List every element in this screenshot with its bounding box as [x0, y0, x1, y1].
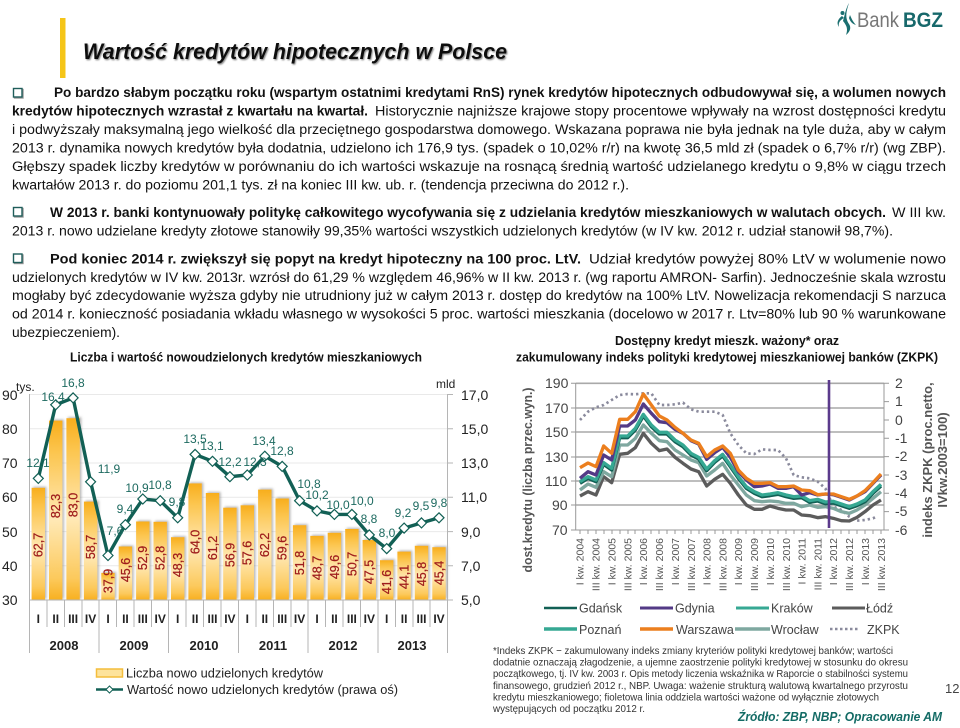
- quarter labels: II: [192, 612, 198, 626]
- bar value labels: 59,6: [276, 536, 290, 560]
- left axis labels: 150: [545, 424, 569, 440]
- quarter labels: IV: [294, 612, 305, 626]
- left chart legend: [96, 666, 398, 697]
- left axis labels: [2, 380, 35, 608]
- line value labels: 12,3: [243, 455, 267, 469]
- x axis quarter labels: III kw. 2005: [622, 538, 634, 591]
- bar value labels: 44,1: [397, 565, 411, 589]
- quarter labels: I: [37, 612, 40, 626]
- bar value labels: 49,6: [328, 555, 342, 579]
- right chart legend: Gdańsk: [579, 602, 623, 616]
- text block: paragraph 1: kredytów hipotecznych wzrastał z kwartału na kwartał.: [12, 104, 368, 118]
- text block: paragraph 2: [12, 205, 946, 238]
- line value labels: 7,6: [107, 524, 124, 538]
- right axis labels: [436, 377, 488, 608]
- left axis labels: 50: [2, 524, 18, 540]
- right chart heading: Dostępny kredyt mieszk. ważony* oraz: [615, 334, 839, 348]
- quarter labels: III: [347, 612, 357, 626]
- right chart legend: Wrocław: [771, 623, 820, 637]
- line value labels: 10,9: [125, 481, 149, 495]
- text block: paragraph 3: udzielonych kredytów w IV kw. 2013r. wzrósł do 61,29 % względem 46,96% w II kw. 2013 r. (wg raportu AMRON- Sarfin). Jednocześnie skala wzrostu: [12, 270, 946, 285]
- title: Wartość kredytów hipotecznych w Polsce: [83, 39, 507, 64]
- bar value labels: 58,7: [84, 535, 98, 559]
- logo: Bank BGZ: BGZ: [903, 9, 943, 32]
- source: Źródło: ZBP, NBP; Opracowanie AM: [737, 709, 943, 724]
- right axis labels: 0: [895, 412, 903, 428]
- right axis title: IVkw.2003=100): [935, 412, 950, 508]
- right axis labels: -1: [895, 430, 908, 446]
- left axis labels: 190: [545, 375, 569, 391]
- year labels: 2009: [120, 638, 148, 653]
- line value labels: 8,8: [361, 512, 378, 526]
- left axis labels: 70: [552, 522, 568, 538]
- quarter labels: II: [261, 612, 268, 626]
- right axis labels: 15,0: [461, 421, 488, 437]
- footnote: dodatnie oznaczają złagodzenie, a ujemne zaostrzenie polityki kredytowej w stosunku do okresu: [493, 658, 908, 668]
- right axis labels: 9,0: [461, 524, 481, 540]
- quarter labels: II: [401, 612, 407, 626]
- x axis quarter labels: III kw. 2011: [812, 538, 824, 590]
- x axis quarter labels: [574, 538, 888, 591]
- left axis labels: 90: [552, 497, 568, 513]
- right axis labels: 17,0: [461, 387, 488, 403]
- line value labels: 9,8: [431, 496, 448, 510]
- left axis labels: 130: [545, 449, 569, 465]
- x axis quarter labels: I kw. 2012: [828, 538, 840, 585]
- quarter labels: IV: [364, 612, 375, 626]
- right chart legend: Łódź: [866, 602, 893, 616]
- quarter labels: IV: [85, 612, 96, 626]
- line value labels: 9,8: [169, 495, 186, 509]
- right chart heading: zakumulowany indeks polityki kredytowej mieszkaniowej banków (ZKPK): [516, 351, 938, 365]
- right chart heading: [516, 334, 938, 365]
- line value labels: 12,8: [270, 444, 294, 458]
- right axis labels: -4: [895, 485, 908, 501]
- bar value labels: 50,7: [345, 552, 359, 576]
- x axis quarter labels: I kw. 2011: [796, 538, 808, 585]
- bar value labels: 83,0: [66, 493, 80, 517]
- text block: paragraph 3: Pod koniec 2014 r. zwiększył się popyt na kredyt hipoteczny na 100 proc. LtV.: [50, 252, 581, 266]
- x axis quarter labels: III kw. 2012: [844, 538, 856, 591]
- text block: paragraph 1: [12, 85, 946, 192]
- x axis quarter labels: III kw. 2004: [590, 538, 602, 591]
- x axis quarter labels: III kw. 2006: [654, 538, 666, 591]
- right axis labels: 13,0: [461, 455, 488, 471]
- year labels: 2012: [329, 638, 357, 653]
- bullet 2: [14, 208, 22, 216]
- bar value labels: 47,5: [363, 560, 377, 584]
- city series and ZKPK: [580, 393, 881, 521]
- page number: 12: [945, 681, 959, 696]
- right chart legend: Kraków: [771, 602, 814, 616]
- text block: paragraph 2: W 2013 r. banki kontynuowały politykę całkowitego wycofywania się z udzielania kredytów mieszkaniowych w walutach obcych.: [50, 205, 886, 220]
- bar value labels: 52,9: [136, 546, 150, 570]
- quarter labels: I: [385, 612, 388, 626]
- right chart legend: Poznań: [579, 623, 621, 637]
- bar value labels: 52,8: [154, 546, 168, 570]
- line value labels: 9,2: [395, 506, 412, 520]
- line value labels: 11,9: [98, 462, 121, 476]
- bar value labels: 37,9: [101, 569, 115, 593]
- right axis labels: -2: [895, 448, 908, 464]
- left axis labels: [545, 375, 569, 538]
- right axis labels: 1: [895, 393, 903, 409]
- year labels: 2010: [190, 638, 218, 653]
- year labels: 2011: [259, 638, 287, 653]
- left axis labels: 170: [545, 400, 569, 416]
- quarter labels: IV: [155, 612, 166, 626]
- bar value labels: 48,3: [171, 553, 185, 577]
- logo: Bank BGZ: Bank: [857, 9, 899, 32]
- bar value labels: 82,3: [49, 494, 63, 518]
- right axis labels: 2: [895, 375, 903, 391]
- bar value labels: 62,2: [258, 533, 272, 557]
- right chart legend: [544, 602, 900, 637]
- line value labels: 10,2: [305, 488, 329, 502]
- text block: paragraph 2: W III kw.: [892, 205, 946, 220]
- right axis labels: -5: [895, 503, 908, 519]
- left axis title: dost.kredytu (liczba przec.wyn.): [520, 388, 535, 572]
- line value labels: 8,0: [379, 526, 396, 540]
- text block: paragraph 2: 2013 r. nowo udzielane kredyty złotowe stanowiły 99,35% wartości wszystkich udzielonych kredytów (w IV kw. 2012 r. udział stanowił 98,7%).: [12, 224, 893, 238]
- left axis labels: 60: [2, 489, 18, 505]
- left chart legend: Wartość nowo udzielonych kredytów (prawa oś): [127, 682, 398, 697]
- left chart heading: Liczba i wartość nowoudzielonych kredytów mieszkaniowych: [70, 351, 422, 365]
- bar value labels: 57,6: [241, 541, 255, 565]
- quarter labels: [37, 612, 445, 626]
- x axis quarter labels: III kw. 2008: [718, 538, 730, 591]
- x axis quarter labels: III kw. 2009: [749, 538, 761, 591]
- x axis quarter labels: I kw. 2008: [702, 538, 714, 585]
- right chart legend: ZKPK: [867, 623, 900, 637]
- bar value labels: 48,7: [310, 556, 324, 580]
- text block: paragraph 1: kwartałów 2013 r. do poziomu 201,1 tys. zł na koniec III kw. ub. r. (tendencja przeciwna do 2012 r.).: [12, 178, 629, 192]
- quarter labels: I: [106, 612, 110, 626]
- bar value labels: 45,4: [432, 561, 446, 585]
- quarter labels: III: [68, 612, 78, 626]
- line value labels: 12,1: [26, 456, 50, 470]
- x axis quarter labels: III kw. 2013: [876, 538, 888, 591]
- text block: paragraph 1: i podwyższały maksymalną jego wielkość dla przeciętnego gospodarstwa domowego. Wskazana poprawa nie była jednak na tyle duża, aby w całym: [12, 122, 946, 137]
- x axis quarter labels: I kw. 2013: [860, 538, 872, 585]
- text block: paragraph 1: Po bardzo słabym początku roku (wspartym ostatnimi kredytami RnS) rynek kredytów hipotecznych odbudowywał się, a wolumen nowych: [54, 85, 946, 100]
- right chart legend: Warszawa: [676, 623, 734, 637]
- quarter labels: III: [207, 612, 218, 626]
- bullet 3: [14, 254, 22, 262]
- footnote: kredytu mieszkaniowego; fioletowa linia oddziela wartości ważone od wyłącznie złotowych: [493, 692, 879, 704]
- line value labels: 13,5: [183, 432, 207, 446]
- left axis labels: 30: [2, 592, 18, 608]
- logo: Bank BGZ: [838, 3, 943, 35]
- text block: paragraph 1: Historycznie najniższe krajowe stopy procentowe wpływały na wzrost dostępności kredytu: [375, 104, 946, 118]
- line value labels: 10,8: [297, 477, 321, 491]
- bar value labels: 51,8: [293, 551, 307, 575]
- purple divider: [828, 380, 830, 528]
- x axis quarter labels: I kw. 2004: [574, 538, 586, 585]
- bar value labels: 45,8: [415, 562, 429, 586]
- right axis labels: -3: [895, 467, 908, 483]
- left axis labels: 110: [545, 473, 568, 489]
- text block: paragraph 1: Głębszy spadek liczby kredytów w porównaniu do ich wartości wskazuje na rosnącą średnią wartość udzielanego kredytu o 9,8% w ciągu trzech: [12, 159, 946, 174]
- bar value labels: 62,7: [32, 533, 46, 557]
- yellow title accent bar: [60, 18, 66, 78]
- quarter labels: I: [315, 612, 319, 626]
- quarter labels: IV: [433, 612, 445, 626]
- left axis labels: tys.: [16, 380, 35, 394]
- footnote: występujących od początku 2012 r.: [492, 704, 645, 715]
- year labels: 2008: [50, 638, 78, 653]
- text block: paragraph 3: ubezpieczeniem).: [12, 325, 120, 340]
- x axis quarter labels: I kw. 2010: [765, 538, 777, 585]
- bars: [32, 418, 446, 600]
- quarter labels: II: [331, 612, 338, 626]
- x axis quarter labels: I kw. 2007: [670, 538, 682, 585]
- line value labels: 9,4: [117, 502, 134, 516]
- quarter labels: I: [246, 612, 249, 626]
- line value labels: 10,8: [148, 478, 172, 492]
- bar value labels: 56,9: [223, 543, 237, 567]
- footnote: początkowego, tj. IV kw. 2003 r. Opis metody liczenia wskaźnika w Raporcie o stabilności systemu: [493, 669, 908, 680]
- x axis quarter labels: III kw. 2010: [781, 538, 793, 591]
- line value labels: 13,4: [252, 434, 276, 448]
- quarter labels: II: [52, 612, 59, 626]
- x axis quarter labels: I kw. 2009: [733, 538, 745, 585]
- text block: paragraph 3: od 2014 r. konieczność posiadania wkładu własnego w wysokości 5 proc. wartości mieszkania (docelowo w 2017 r. Ltv=80% lub 90 % warunkowane: [12, 306, 946, 322]
- quarter labels: II: [122, 612, 129, 626]
- quarter labels: III: [138, 612, 148, 626]
- line value labels: 10,0: [350, 494, 374, 508]
- left axis labels: 70: [2, 455, 18, 471]
- x axis quarter labels: I kw. 2006: [638, 538, 650, 585]
- year labels: 2013: [398, 638, 426, 653]
- bar value labels: 45,6: [119, 558, 133, 582]
- line value labels: [26, 376, 448, 540]
- bar value labels: [32, 493, 446, 594]
- right axis labels: 5,0: [461, 592, 481, 608]
- bar value labels: 64,0: [188, 530, 202, 554]
- text block: paragraph 3: mogłaby być zdecydowanie wyższa gdyby nie utrudniony już w całym 2013 r. dostęp do kredytów na 100% LtV. Nowelizacja rekomendacji S narzuca: [12, 288, 947, 303]
- right axis title: indeks ZKPK (proc.netto,: [920, 382, 935, 538]
- line value labels: 16,4: [41, 390, 65, 404]
- quarter labels: IV: [224, 612, 236, 626]
- footnote: *Indeks ZKPK − zakumulowany indeks zmiany kryteriów polityki kredytowej banków; wartości: [493, 646, 893, 657]
- line value labels: 12,2: [218, 455, 242, 469]
- footnote: [492, 646, 908, 715]
- footnote: finansowego, grudzień 2012 r., NBP. Uwaga: ważenie strukturą walutową kwartalnego przyrostu: [493, 681, 908, 692]
- line chart: credit availability and ZKPK index: [520, 375, 950, 591]
- text block: paragraph 1: 2013 r. dynamika nowych kredytów była dodatnia, udzielono ich 176,9 tys. (spadek o 10,02% r/r) na kwotę 36,5 mld zł (spadek o 6,7% r/r) (wg ZBP).: [12, 140, 946, 156]
- line: value of new loans: [38, 398, 439, 556]
- text block: paragraph 3: [12, 252, 947, 340]
- left axis labels: 90: [2, 387, 18, 403]
- x axis quarter labels: III kw. 2007: [686, 538, 698, 591]
- right chart legend: Gdynia: [675, 602, 715, 616]
- right axis labels: mld: [436, 377, 455, 391]
- line value labels: 10,0: [326, 498, 350, 512]
- bullet 1: [14, 88, 22, 97]
- text block: paragraph 3: Udział kredytów powyżej 80% LtV w wolumenie nowo: [589, 252, 946, 266]
- right axis labels: -6: [895, 522, 908, 538]
- quarter labels: III: [416, 612, 427, 626]
- quarter labels: I: [176, 612, 179, 626]
- line value labels: 9,5: [413, 499, 430, 513]
- left axis labels: 40: [2, 558, 18, 574]
- right axis labels: [895, 375, 908, 538]
- right axis labels: 11,0: [461, 489, 487, 505]
- line value labels: 13,1: [200, 439, 224, 453]
- year labels: [50, 638, 426, 653]
- axes and separators: [29, 394, 453, 653]
- right axis labels: 7,0: [461, 558, 481, 574]
- x axis quarter labels: I kw. 2005: [606, 538, 618, 585]
- quarter labels: III: [277, 612, 287, 626]
- combo chart: number and value of new loans: [2, 376, 488, 653]
- line value labels: 16,8: [61, 376, 85, 390]
- bar value labels: 61,2: [206, 536, 220, 560]
- left axis labels: 80: [2, 421, 18, 437]
- right axis title: [920, 382, 950, 538]
- left chart legend: Liczba nowo udzielonych kredytów: [126, 666, 324, 680]
- bar value labels: 41,6: [380, 570, 394, 594]
